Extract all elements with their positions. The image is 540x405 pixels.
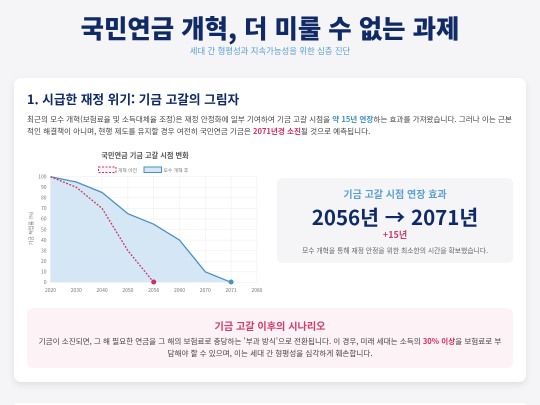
stat note: 모수 개혁을 통해 재정 안정을 위한 최소한의 시간을 확보했습니다. [302, 245, 488, 255]
stat value: 2056년 → 2071년 [312, 201, 478, 231]
legend [98, 167, 189, 174]
y axis: 0 [44, 279, 47, 286]
y axis: 60 [41, 216, 47, 223]
panel: next section [14, 402, 526, 405]
x axis: 2056 [148, 287, 159, 294]
x axis: 2020 [45, 287, 56, 294]
title: 국민연금 개혁, 더 미룰 수 없는 과제 [81, 10, 459, 46]
callout text: 기금이 소진되면, 그 해 필요한 연금을 그 해의 보험료로 충당하는 '부과 방식'으로 전환됩니다. 이 경우, 미래 세대는 소득의 30% 이상을 보험료로 부담해야 할 수 있으며, 이는 세대 간 형평성을 심각하게 훼손합니다. [39, 336, 501, 359]
y axis: 50 [41, 226, 47, 233]
legend: 개혁 이전 [118, 167, 137, 174]
section heading: 1. 시급한 재정 위기: 기금 고갈의 그림자 [27, 89, 239, 108]
x axis [45, 287, 263, 294]
intro text: 최근의 모수 개혁(보험료율 및 소득대체율 조정)은 재정 안정화에 일부 기여하여 기금 고갈 시점을 약 15년 연장하는 효과를 가져왔습니다. 그러나 이는 근본적인 해결책이 아니며, 현행 제도를 유지할 경우 여전히 국민연금 기금은 2071년경 소진될 것으로 예측됩니다. [27, 114, 512, 137]
x axis: 2040 [97, 287, 108, 294]
y axis: 10 [41, 269, 47, 276]
y axis: 90 [41, 184, 47, 191]
x axis: 2070 [200, 287, 211, 294]
legend: 모수 개혁 후 [164, 167, 189, 174]
stat delta: +15년 [383, 228, 407, 241]
stat heading: 기금 고갈 시점 연장 효과 [343, 186, 447, 201]
y axis: 80 [41, 195, 47, 202]
line chart: fund depletion [28, 151, 263, 294]
y axis title: 기금 적립률 (%) [28, 211, 35, 245]
x axis: 2030 [71, 287, 82, 294]
y axis: 40 [41, 237, 47, 244]
y axis: 20 [41, 258, 47, 265]
y axis: 70 [41, 205, 47, 212]
stat card: depletion extension [277, 178, 513, 263]
callout heading: 기금 고갈 이후의 시나리오 [214, 318, 325, 333]
x axis: 2080 [251, 287, 263, 294]
x axis: 2071 [226, 287, 237, 294]
series: after reform [50, 177, 234, 284]
y axis [38, 174, 47, 286]
callout: depletion scenario [27, 308, 513, 368]
y axis: 30 [41, 247, 47, 254]
series: before reform [50, 177, 156, 284]
chart title: 국민연금 기금 고갈 시점 변화 [101, 151, 189, 161]
y axis: 100 [38, 174, 47, 180]
x axis: 2050 [122, 287, 134, 294]
panel: fiscal crisis [14, 78, 526, 382]
subtitle: 세대 간 형평성과 지속가능성을 위한 심층 진단 [190, 45, 350, 57]
x axis: 2060 [174, 287, 185, 294]
